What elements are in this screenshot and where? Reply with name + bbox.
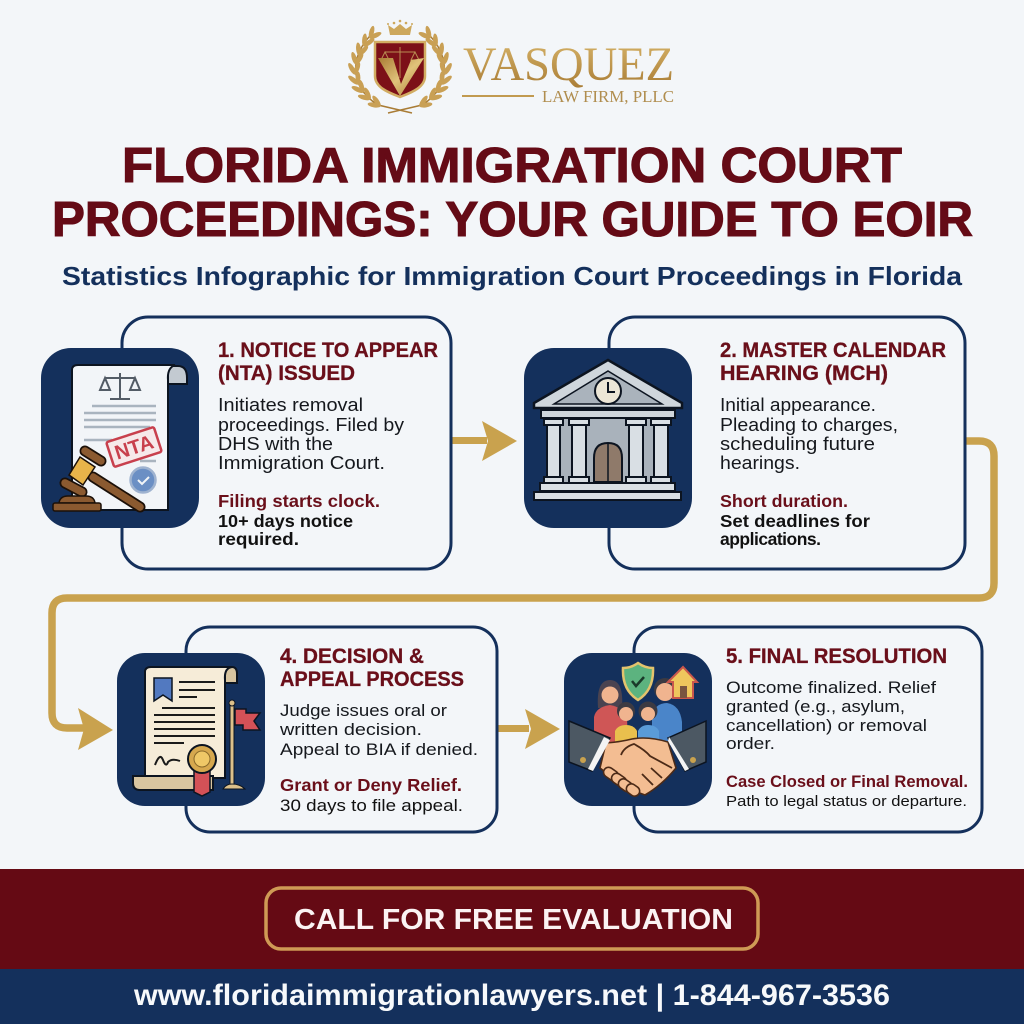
step 2 body: Pleading to charges, xyxy=(720,414,898,435)
step 5 body xyxy=(726,678,936,753)
step 2 body: Initial appearance. xyxy=(720,394,876,415)
step 1 heading: 1. NOTICE TO APPEAR xyxy=(218,339,438,362)
step 1 key fact xyxy=(218,491,380,549)
step 4 key fact: Grant or Deny Relief. xyxy=(280,775,462,795)
title xyxy=(52,138,973,247)
button: call for free evaluation xyxy=(266,888,758,949)
step 1 heading xyxy=(218,339,438,385)
step 4 body: Appeal to BIA if denied. xyxy=(280,740,478,759)
step 5 key fact xyxy=(726,773,968,810)
step 5 body: Outcome finalized. Relief xyxy=(726,678,936,697)
logo V monogram xyxy=(378,58,424,96)
step 2 heading xyxy=(720,339,946,385)
step 4 key fact: 30 days to file appeal. xyxy=(280,797,463,815)
step 1 heading: (NTA) ISSUED xyxy=(218,362,355,385)
arrow: step 1 to step 2 xyxy=(451,421,517,461)
icon: family and handshake xyxy=(564,653,712,806)
card outline xyxy=(634,627,982,832)
card outline xyxy=(186,627,497,832)
step 1 key fact: required. xyxy=(218,529,299,549)
step 5 key fact: Path to legal status or departure. xyxy=(726,793,967,810)
step 5 body: order. xyxy=(726,734,775,753)
logo scales xyxy=(381,47,419,78)
step 5 body: granted (e.g., asylum, xyxy=(726,697,905,716)
arrow: connector step 2 to step 4 xyxy=(52,441,994,750)
step 5 key fact: Case Closed or Final Removal. xyxy=(726,773,968,791)
subtitle: Statistics Infographic for Immigration Court Proceedings in Florida xyxy=(62,261,963,291)
card outline xyxy=(122,317,451,569)
step 1 body: Immigration Court. xyxy=(218,452,385,473)
step 4 key fact xyxy=(280,775,463,815)
step 2 key fact xyxy=(720,491,870,549)
step 2 key fact: Set deadlines for xyxy=(720,511,870,531)
step 1 body: proceedings. Filed by xyxy=(218,414,405,435)
step 1 body xyxy=(218,394,405,473)
title: FLORIDA IMMIGRATION COURT xyxy=(122,138,902,193)
step 1 key fact: Filing starts clock. xyxy=(218,491,380,511)
step 2 body xyxy=(720,394,898,473)
logo wordmark: VASQUEZ xyxy=(463,38,674,91)
card outline xyxy=(609,317,965,569)
step 5 heading: 5. FINAL RESOLUTION xyxy=(726,645,947,668)
icon: NTA document and gavel: NTA xyxy=(112,431,157,465)
step 2 heading: HEARING (MCH) xyxy=(720,362,888,385)
panel: step 5 final resolution xyxy=(564,627,982,832)
icon: courthouse xyxy=(524,348,692,528)
step 2 key fact: Short duration. xyxy=(720,491,848,511)
logo shield xyxy=(375,42,425,97)
step 4 body: written decision. xyxy=(279,720,422,739)
logo wreath xyxy=(347,25,453,113)
step 4 body: Judge issues oral or xyxy=(280,701,447,720)
step 4 body xyxy=(279,701,478,759)
icon: NTA document and gavel xyxy=(41,348,199,528)
step 4 heading: APPEAL PROCESS xyxy=(280,668,464,691)
step 1 body: DHS with the xyxy=(218,433,333,454)
panel: step 2 master calendar hearing xyxy=(524,317,965,569)
button: call for free evaluation: CALL FOR FREE EVALUATION xyxy=(294,904,733,936)
step 1 body: Initiates removal xyxy=(218,394,363,415)
logo crown xyxy=(387,20,413,35)
step 2 heading: 2. MASTER CALENDAR xyxy=(720,339,946,362)
arrow: step 4 to step 5 xyxy=(497,709,560,749)
title: PROCEEDINGS: YOUR GUIDE TO EOIR xyxy=(52,192,973,247)
step 2 body: scheduling future xyxy=(720,433,875,454)
step 5 body: cancellation) or removal xyxy=(726,716,927,735)
logo rule xyxy=(462,95,534,97)
panel: step 4 decision and appeal xyxy=(117,627,497,832)
logo subtitle: LAW FIRM, PLLC xyxy=(542,87,674,106)
step 4 heading: 4. DECISION & xyxy=(280,645,424,668)
step 2 body: hearings. xyxy=(720,452,800,473)
logo: Vasquez Law Firm xyxy=(347,20,674,113)
step 4 heading xyxy=(280,645,464,691)
contact band xyxy=(0,969,1024,1024)
step 2 key fact: applications. xyxy=(720,529,821,549)
icon: decision scroll with seal and flag xyxy=(117,653,265,806)
panel: step 1 notice to appear xyxy=(41,317,451,569)
contact details: www.floridaimmigrationlawyers.net | 1-844-967-3536 xyxy=(133,979,890,1012)
call-to-action band xyxy=(0,869,1024,969)
step 1 key fact: 10+ days notice xyxy=(218,511,353,531)
